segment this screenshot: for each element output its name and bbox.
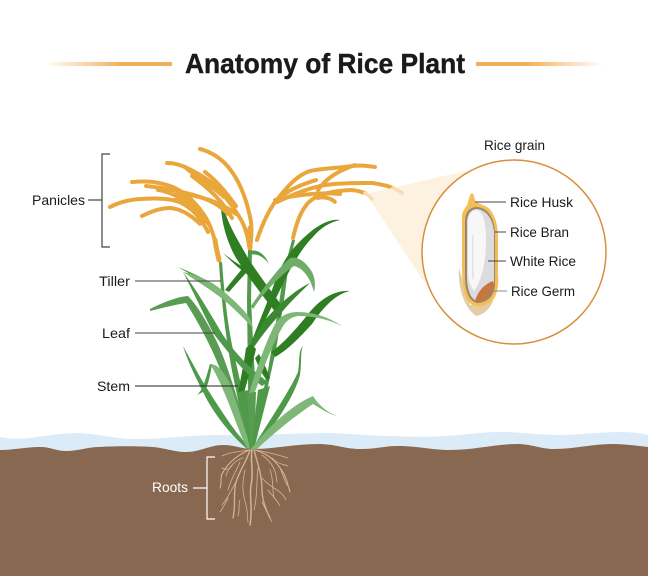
rice plant leaves and stems [150,198,350,449]
panicles bracket [88,154,110,247]
rice panicles [110,149,393,260]
soil ground [0,444,648,576]
plant labels: Panicles [32,192,85,208]
dark leaves back [221,198,282,318]
plant labels: Leaf [102,325,130,341]
grain leader lines [475,202,507,291]
front light leaf [249,312,342,393]
mid left leaf [150,296,252,449]
central mid leaves [238,390,254,449]
lower husk [459,268,499,316]
grain labels: Rice Bran [510,224,569,240]
germ [475,281,494,301]
roots bracket and label: Roots [152,479,188,495]
top right light leaf [251,258,315,309]
left slender leaf [183,346,251,449]
white rice [467,209,494,301]
grain labels: Rice Husk [510,194,574,210]
title with decorative rules: Anatomy of Rice Plant [185,48,465,79]
bran layer [465,207,495,303]
pale panicle tips [365,188,402,199]
top left long leaves [183,272,268,386]
right light wide leaf [251,396,337,449]
grain labels: Rice grain [484,137,545,153]
grain labels: Rice Germ [511,283,575,299]
back stems [219,262,253,449]
grain labels [484,137,576,299]
plant labels: Stem [97,378,130,394]
roots [220,449,290,525]
water band [0,432,648,460]
roots bracket and label [152,457,215,519]
plant labels [32,192,130,394]
title with decorative rules [45,48,603,79]
left wide light leaf [210,364,252,449]
magnified grain circle [422,160,606,344]
outer husk [462,193,498,306]
zoom cone [366,170,470,283]
rice grain illustration [459,193,499,316]
plant leader lines [135,281,238,386]
grain labels: White Rice [510,253,576,269]
plant labels: Tiller [99,273,130,289]
right thin mid leaf [252,346,303,449]
